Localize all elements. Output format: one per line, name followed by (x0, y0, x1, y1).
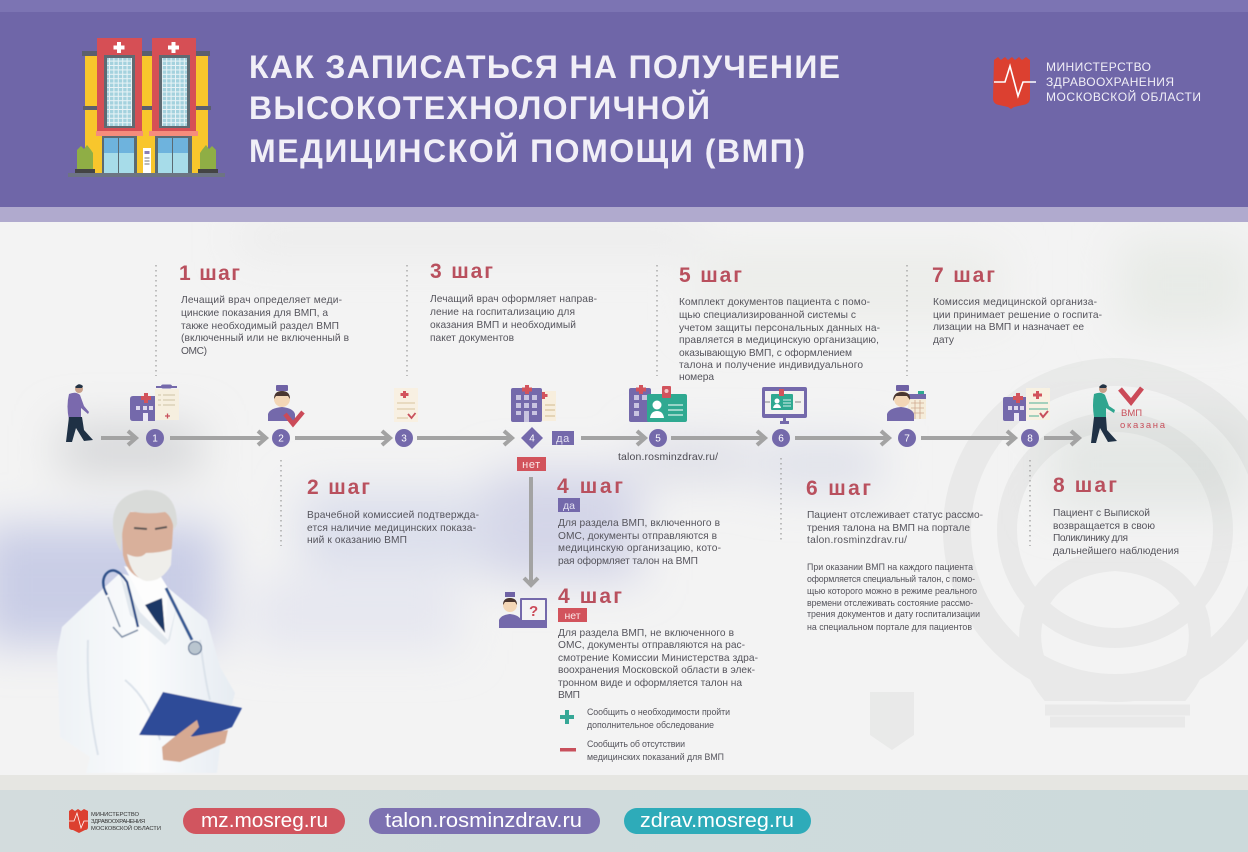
step markers: 1 (152, 434, 158, 444)
step 8 text: возвращается в свою (1053, 521, 1155, 532)
note on special coupon: щью которого можно в режиме реального (807, 586, 977, 596)
step 4 no text (558, 585, 758, 701)
background: blurred hospital photo (0, 222, 1248, 775)
header band (0, 0, 1248, 222)
step 1 text: Лечащий врач определяет меди- (181, 295, 342, 306)
step 2 text: 2 шаг (307, 476, 370, 499)
ministry logo: ЗДРАВООХРАНЕНИЯ (1046, 75, 1174, 89)
step 4 yes text: Для раздела ВМП, включенного в (558, 518, 720, 529)
step 5 text: 5 шаг (679, 264, 742, 287)
icon: step 8 hospital and report (1003, 388, 1050, 421)
icon: step 3 document (394, 388, 418, 422)
step 2 text: ний к оказанию ВМП (307, 535, 407, 546)
step 4 yes text (557, 475, 721, 567)
step 6 text: трения талона на ВМП на портале (807, 523, 970, 534)
step 4 yes text: рая оформляет талон на ВМП (558, 555, 698, 567)
step 4 yes text: медицинскую организацию, кото- (558, 543, 721, 554)
step 1 text: (включенный или не включенный в (181, 333, 349, 344)
step 8 text (1053, 474, 1179, 557)
timeline arrows (101, 431, 1079, 585)
step 8 text: Пациент с Выпиской (1053, 508, 1150, 519)
icon: step 5 hospital and ID card (629, 385, 687, 422)
note on special coupon: оформляется специальный талон, с помо- (807, 574, 975, 584)
icon: walking patient (66, 384, 93, 442)
step 5 text: правляется в медицинскую организацию, (679, 335, 879, 346)
step 7 text: лизации на ВМП и назначает ее (933, 322, 1084, 333)
link pill: mz.mosreg.ru: mz.mosreg.ru (201, 810, 328, 832)
step 4 no text: тронном виде и оформляется талон на (558, 677, 742, 689)
step 5 text (679, 264, 880, 383)
step 4 yes text: ОМС, документы отправляются в (558, 531, 717, 542)
step 5 text: Комплект документов пациента с помо- (679, 297, 870, 308)
doctor portrait (57, 490, 242, 773)
step 3 text: Лечащий врач оформляет направ- (430, 293, 597, 305)
step markers: 2 (278, 434, 284, 444)
outcome: no medical indications (560, 739, 724, 762)
outcome: additional examination (560, 707, 730, 730)
step 3 text: ление на госпитализацию для (430, 307, 575, 318)
link pill: zdrav.mosreg.ru: zdrav.mosreg.ru (640, 810, 794, 832)
outcome: no medical indications: Сообщить об отсутствии (587, 739, 685, 749)
icon: recovered patient with check (1091, 384, 1166, 443)
ministry logo (993, 57, 1201, 109)
step 1 text: ОМС) (181, 346, 207, 357)
title: МЕДИЦИНСКОЙ ПОМОЩИ (ВМП) (249, 133, 805, 169)
note on special coupon: времени отслеживать состояние рассмо- (807, 598, 973, 608)
outcome: additional examination: дополнительное обследование (587, 720, 714, 730)
step 2 text: Врачебной комиссией подтвержда- (307, 509, 479, 521)
step 4 yes text: да (563, 500, 575, 512)
step 1 text: также необходимый раздел ВМП (181, 320, 339, 332)
note on special coupon: трения документов и дату госпитализации (807, 609, 980, 619)
step 2 text: ется наличие медицинских показа- (307, 523, 476, 534)
title (249, 49, 840, 169)
step markers: 7 (904, 434, 910, 444)
step markers: 3 (401, 434, 407, 444)
step 8 text: Поликлинику для (1053, 533, 1128, 544)
title: ВЫСОКОТЕХНОЛОГИЧНОЙ (249, 90, 710, 126)
footer ministry logo: МОСКОВСКОЙ ОБЛАСТИ (91, 824, 161, 832)
link pill: mz.mosreg.ru (183, 808, 345, 834)
step 5 text: щью специализированной системы с (679, 310, 856, 321)
step markers (146, 427, 1039, 449)
link pill: talon.rosminzdrav.ru: talon.rosminzdrav.ru (385, 810, 582, 832)
step 6 text (806, 477, 983, 546)
icon: step 1 hospital and checklist (130, 384, 179, 421)
step 1 text (179, 262, 349, 357)
step 1 text: 1 шаг (179, 262, 240, 285)
step 4 no text: Для раздела ВМП, не включенного в (558, 628, 734, 639)
step 6 text: talon.rosminzdrav.ru/ (807, 535, 907, 546)
step 3 text: 3 шаг (430, 260, 493, 283)
step 4 no text: смотрение Комиссии Министерства здра- (558, 653, 758, 664)
badge: да (552, 431, 574, 445)
note on special coupon: При оказании ВМП на каждого пациента (807, 562, 973, 572)
step 7 text (932, 264, 1102, 346)
note on special coupon: на специальном портале для пациентов (807, 622, 972, 632)
step 6 text: 6 шаг (806, 477, 871, 500)
footer ministry logo (69, 809, 161, 833)
step 7 text: 7 шаг (932, 264, 995, 287)
dotted connector lines (156, 265, 1030, 546)
icon: step 6 monitor with card (762, 387, 807, 424)
badge: нет: нет (522, 459, 541, 471)
step 2 text (307, 476, 479, 546)
link pill: talon.rosminzdrav.ru (369, 808, 600, 834)
ministry logo: МОСКОВСКОЙ ОБЛАСТИ (1046, 89, 1201, 104)
icon: doctor at monitor with question: ? (529, 603, 538, 620)
step 5 text: оказывающую ВМП, с оформлением (679, 347, 852, 359)
footer band (0, 790, 1248, 852)
step 4 no text: ВМП (558, 690, 580, 701)
step 7 text: ции принимает решение о госпита- (933, 310, 1102, 321)
step 3 text (430, 260, 597, 344)
icon: step 7 doctor with calendar (887, 385, 926, 421)
badge: нет (517, 457, 546, 471)
step markers: 6 (778, 434, 784, 444)
step 4 no text: 4 шаг (558, 585, 622, 608)
step 5 text: талона и получение индивидуального (679, 360, 863, 371)
icon: doctor at monitor with question (499, 592, 547, 628)
step 5 text: номера (679, 372, 714, 383)
step markers: 4 (529, 434, 535, 444)
outcome: no medical indications: медицинских показаний для ВМП (587, 752, 724, 762)
step 4 yes text: 4 шаг (557, 475, 623, 498)
icon: step 4 hospital and document (511, 385, 556, 422)
footer ministry logo: ЗДРАВООХРАНЕНИЯ (91, 819, 145, 825)
step 5 text: учетом защиты персональных данных на- (679, 323, 880, 334)
step 8 text: дальнейшего наблюдения (1053, 545, 1179, 557)
badge: да: да (556, 433, 570, 445)
step 1 text: цинские показания для ВМП, а (181, 308, 328, 319)
step 8 text: 8 шаг (1053, 474, 1117, 497)
step 3 text: пакет документов (430, 333, 514, 344)
icon: recovered patient with check: ВМП (1121, 408, 1142, 419)
footer ministry logo: МИНИСТЕРСТВО (91, 812, 139, 818)
icon: hospital building (68, 38, 225, 177)
step markers: 5 (655, 434, 661, 444)
icon: recovered patient with check: оказана (1120, 420, 1166, 431)
ministry logo: МИНИСТЕРСТВО (1046, 60, 1151, 74)
link pill: zdrav.mosreg.ru (624, 808, 811, 834)
step 7 text: дату (933, 335, 955, 346)
bottom light band (0, 775, 1248, 790)
step 4 no text: ОМС, документы отправляются на рас- (558, 640, 745, 651)
icon: step 2 doctor with check (268, 385, 303, 424)
title: КАК ЗАПИСАТЬСЯ НА ПОЛУЧЕНИЕ (249, 49, 840, 85)
step 4 no text: воохранения Московской области в элек- (558, 664, 755, 676)
ghost lamp watermark (870, 372, 1248, 750)
step 7 text: Комиссия медицинской организа- (933, 297, 1097, 308)
step 6 text: Пациент отслеживает статус рассмо- (807, 510, 983, 521)
step markers: 8 (1027, 434, 1033, 444)
step 3 text: оказания ВМП и необходимый (430, 319, 576, 331)
note on special coupon (807, 562, 980, 632)
step 4 no text: нет (564, 610, 581, 622)
portal link: talon.rosminzdrav.ru/ (618, 451, 718, 463)
outcome: additional examination: Сообщить о необходимости пройти (587, 707, 730, 717)
